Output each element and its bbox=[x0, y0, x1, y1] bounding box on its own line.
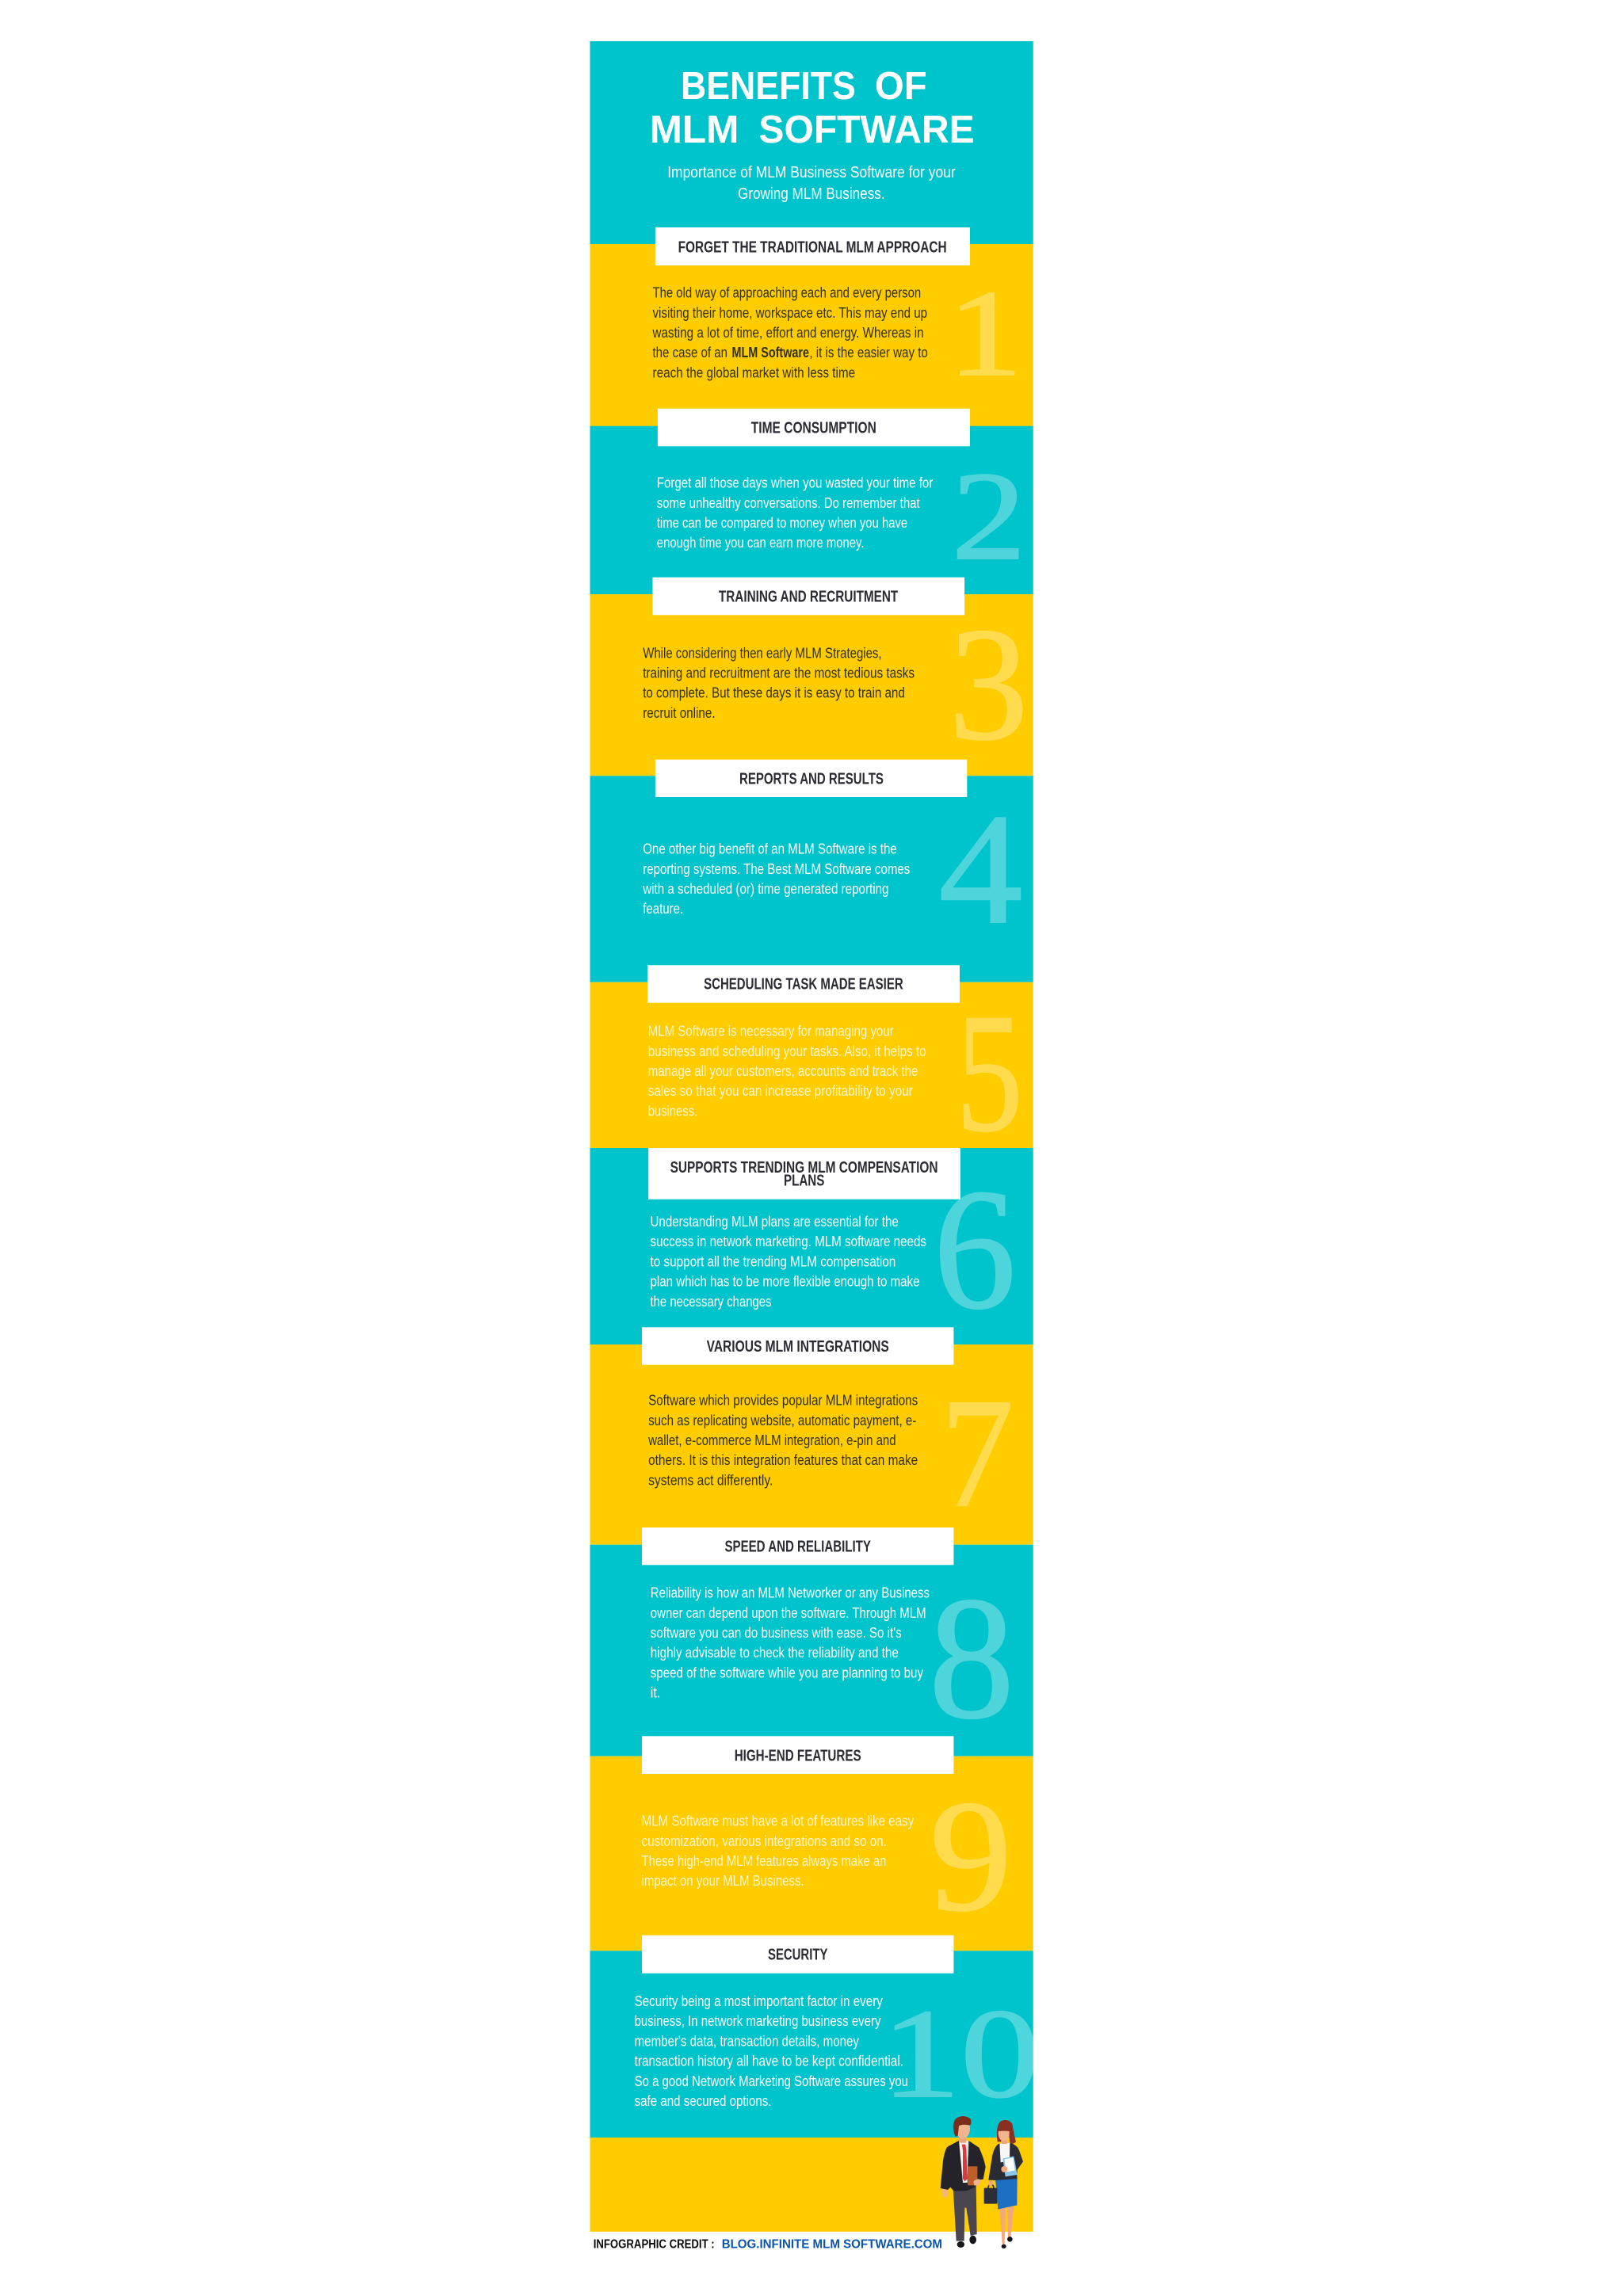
body text 8: speed of the software while you are planning to buy bbox=[651, 1665, 923, 1680]
heading 1: FORGET THE TRADITIONAL MLM APPROACH bbox=[678, 238, 947, 256]
body text 2: time can be compared to money when you have bbox=[657, 515, 907, 531]
body text 2: some unhealthy conversations. Do remember that bbox=[657, 495, 920, 511]
number 7: 7 bbox=[941, 1366, 1014, 1539]
body text 4: with a scheduled (or) time generated reporting bbox=[642, 881, 889, 897]
subtitle: Growing MLM Business. bbox=[738, 185, 885, 203]
title: OF bbox=[875, 65, 927, 108]
panel: 7 integrations bbox=[590, 1327, 1033, 1545]
body text 9: MLM Software must have a lot of features like easy bbox=[642, 1814, 914, 1829]
body text 9: customization, various integrations and so on. bbox=[642, 1833, 887, 1849]
body text 1: visiting their home, workspace etc. This may end up bbox=[653, 305, 927, 321]
infographic credit bbox=[594, 2237, 942, 2251]
heading 7: VARIOUS MLM INTEGRATIONS bbox=[707, 1338, 889, 1356]
title: SOFTWARE bbox=[758, 109, 975, 151]
panel: 8 speed and reliability bbox=[590, 1527, 1033, 1756]
man bbox=[941, 2116, 986, 2248]
body text 9 bbox=[642, 1814, 914, 1889]
body text 8: owner can depend upon the software. Through MLM bbox=[651, 1605, 926, 1621]
panel: 4 reports and results bbox=[590, 760, 1033, 982]
panel: 5 scheduling task bbox=[590, 965, 1033, 1167]
body text 2: enough time you can earn more money. bbox=[657, 535, 864, 551]
panel: 3 training and recruitment bbox=[590, 578, 1033, 776]
number 8: 8 bbox=[929, 1561, 1014, 1755]
body text 3: recruit online. bbox=[643, 705, 716, 721]
body text 5 bbox=[648, 1024, 926, 1119]
body text 2 bbox=[657, 475, 933, 551]
number 10: 10 bbox=[881, 1983, 1040, 2124]
number 1: 1 bbox=[948, 265, 1022, 402]
body text 6 bbox=[650, 1214, 926, 1310]
subtitle: Importance of MLM Business Software for your bbox=[667, 164, 956, 181]
number 3: 3 bbox=[949, 595, 1028, 774]
body text 10: business, In network marketing business every bbox=[635, 2013, 881, 2029]
body text 6: Understanding MLM plans are essential for the bbox=[650, 1214, 899, 1230]
body text 5: sales so that you can increase profitability to your bbox=[648, 1083, 913, 1099]
body text 4: feature. bbox=[643, 901, 683, 917]
heading 10: SECURITY bbox=[768, 1947, 828, 1964]
panel: 1 forget the traditional approach bbox=[590, 227, 1033, 426]
number 2: 2 bbox=[952, 445, 1026, 586]
body text 4: One other big benefit of an MLM Software is the bbox=[643, 841, 897, 857]
body text 7: systems act differently. bbox=[648, 1472, 773, 1488]
infographic credit: INFOGRAPHIC CREDIT : bbox=[594, 2237, 715, 2251]
heading 3: TRAINING AND RECRUITMENT bbox=[719, 589, 898, 606]
heading 2 bbox=[658, 409, 970, 446]
body text 1: wasting a lot of time, effort and energy. Whereas in bbox=[652, 325, 924, 341]
body text 6: to support all the trending MLM compensation bbox=[650, 1253, 896, 1269]
body text 1: The old way of approaching each and every person bbox=[653, 285, 921, 301]
body text 7: wallet, e-commerce MLM integration, e-pin and bbox=[647, 1432, 896, 1448]
body text 7: such as replicating website, automatic payment, e- bbox=[648, 1413, 916, 1428]
number 4: 4 bbox=[938, 782, 1022, 957]
body text 3: to complete. But these days it is easy to train and bbox=[643, 685, 905, 701]
body text 10: transaction history all have to be kept confidential. bbox=[635, 2054, 903, 2069]
heading 8: SPEED AND RELIABILITY bbox=[724, 1539, 871, 1556]
body text 6: the necessary changes bbox=[650, 1294, 772, 1310]
number 9: 9 bbox=[930, 1768, 1012, 1944]
body text 6: success in network marketing. MLM software needs bbox=[650, 1234, 926, 1249]
title: MLM bbox=[650, 109, 739, 151]
body text 5: MLM Software is necessary for managing your bbox=[648, 1024, 894, 1039]
heading 4: REPORTS AND RESULTS bbox=[739, 770, 884, 788]
heading 5 bbox=[647, 965, 960, 1003]
heading 2: TIME CONSUMPTION bbox=[751, 420, 876, 437]
heading 7 bbox=[642, 1327, 953, 1365]
heading 9 bbox=[642, 1736, 953, 1774]
body text 3: While considering then early MLM Strategies, bbox=[643, 645, 882, 661]
body text 10: Security being a most important factor in every bbox=[635, 1993, 883, 2009]
body text 1: reach the global market with less time bbox=[653, 364, 855, 380]
body text 7 bbox=[647, 1393, 918, 1488]
heading 1 bbox=[655, 227, 970, 265]
panel: 10 security bbox=[590, 1936, 1040, 2138]
panel: 9 high-end features bbox=[590, 1736, 1033, 1951]
body text 9: These high-end MLM features always make an bbox=[642, 1853, 886, 1869]
body text 8: Reliability is how an MLM Networker or any Business bbox=[651, 1585, 930, 1601]
heading 6 bbox=[648, 1148, 960, 1199]
heading 9: HIGH-END FEATURES bbox=[735, 1747, 861, 1764]
heading 6: PLANS bbox=[784, 1173, 824, 1190]
header panel bbox=[590, 41, 1033, 244]
body text 1: , it is the easier way to bbox=[809, 345, 928, 360]
title bbox=[650, 65, 975, 151]
subtitle bbox=[667, 164, 956, 203]
body text 10: So a good Network Marketing Software assures you bbox=[635, 2073, 908, 2089]
number 5: 5 bbox=[956, 979, 1022, 1167]
body text 4 bbox=[642, 841, 910, 917]
heading 5: SCHEDULING TASK MADE EASIER bbox=[704, 976, 903, 994]
title: BENEFITS bbox=[681, 65, 856, 108]
footer yellow band bbox=[590, 2138, 1033, 2232]
body text 6: plan which has to be more flexible enough to make bbox=[650, 1274, 919, 1290]
body text 10: safe and secured options. bbox=[635, 2093, 772, 2109]
body text 8: it. bbox=[651, 1685, 660, 1701]
heading 6: SUPPORTS TRENDING MLM COMPENSATION bbox=[670, 1159, 938, 1177]
infographic credit: BLOG.INFINITE MLM SOFTWARE.COM bbox=[722, 2237, 942, 2251]
body text 9: impact on your MLM Business. bbox=[642, 1873, 804, 1889]
body text 8: software you can do business with ease. So it's bbox=[651, 1625, 902, 1641]
body text 5: business and scheduling your tasks. Also, it helps to bbox=[648, 1043, 926, 1059]
body text 5: manage all your customers, accounts and track the bbox=[648, 1063, 918, 1079]
body text 1: the case of an bbox=[653, 345, 727, 360]
number 6: 6 bbox=[934, 1154, 1016, 1345]
woman bbox=[984, 2120, 1023, 2248]
heading 8 bbox=[642, 1527, 953, 1565]
body text 5: business. bbox=[648, 1103, 697, 1119]
body text 3: training and recruitment are the most tedious tasks bbox=[643, 666, 915, 681]
heading 3 bbox=[653, 578, 964, 615]
body text 4: reporting systems. The Best MLM Software comes bbox=[643, 861, 910, 877]
heading 10 bbox=[642, 1936, 953, 1974]
body text 8: highly advisable to check the reliability and the bbox=[651, 1645, 899, 1661]
body text 2: Forget all those days when you wasted your time for bbox=[657, 475, 933, 491]
body text 10: member's data, transaction details, money bbox=[635, 2033, 859, 2049]
icon: business people bbox=[941, 2116, 1023, 2248]
panel: 2 time consumption bbox=[590, 409, 1033, 594]
panel: 6 compensation plans bbox=[590, 1148, 1033, 1345]
body text 1: MLM Software bbox=[732, 345, 809, 360]
body text 1 bbox=[652, 285, 928, 380]
body text 7: others. It is this integration features that can make bbox=[648, 1452, 918, 1468]
body text 8 bbox=[651, 1585, 930, 1701]
heading 4 bbox=[655, 760, 967, 797]
body text 7: Software which provides popular MLM integrations bbox=[648, 1393, 918, 1409]
body text 3 bbox=[643, 645, 915, 721]
body text 10 bbox=[635, 1993, 908, 2109]
